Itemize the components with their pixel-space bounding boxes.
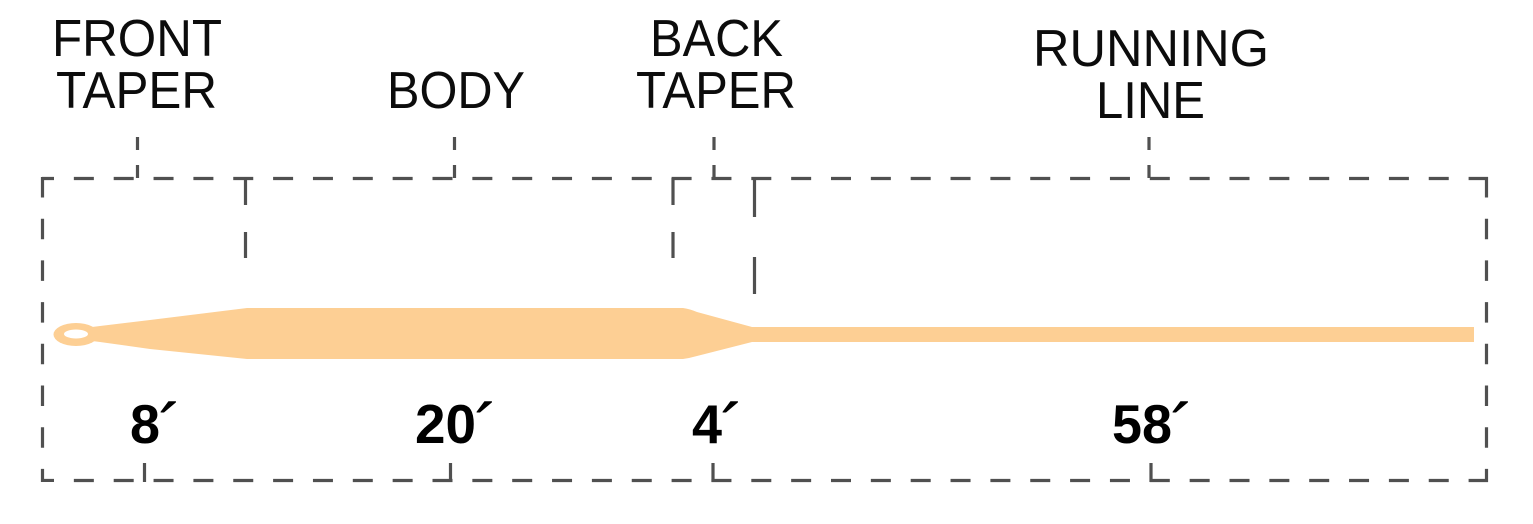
length: back taper — [692, 389, 745, 472]
length: body: ´ — [474, 389, 499, 472]
section tick marks: bottom — [144, 463, 1151, 482]
length: front taper: ´ — [158, 389, 183, 472]
dashed frame: top and bottom brackets — [30, 177, 1488, 502]
fly line shape — [54, 308, 1474, 359]
length: running line — [1112, 389, 1195, 472]
length: running line: 58 — [1112, 393, 1172, 455]
label: back taper: BACK — [650, 10, 783, 68]
label: body: BODY — [387, 62, 525, 120]
length: front taper: 8 — [130, 393, 160, 455]
label: running line: LINE — [1096, 72, 1205, 130]
label: front taper: FRONT — [52, 10, 222, 68]
icon: line loop — [54, 323, 98, 346]
length: front taper — [130, 389, 183, 472]
length: back taper: ´ — [720, 389, 745, 472]
length: body: 20 — [415, 393, 476, 455]
length: back taper: 4 — [692, 393, 722, 455]
label: front taper: TAPER — [56, 62, 217, 120]
taper profile — [92, 308, 1474, 359]
section tick marks: top — [138, 137, 1149, 294]
length: body — [415, 389, 499, 472]
label: running line: RUNNING — [1033, 20, 1269, 78]
label: front taper — [52, 10, 222, 120]
label: running line — [1033, 20, 1269, 130]
length: running line: ´ — [1170, 389, 1195, 472]
label: back taper — [636, 10, 796, 120]
line loop hole — [64, 330, 88, 338]
label: back taper: TAPER — [636, 62, 796, 120]
